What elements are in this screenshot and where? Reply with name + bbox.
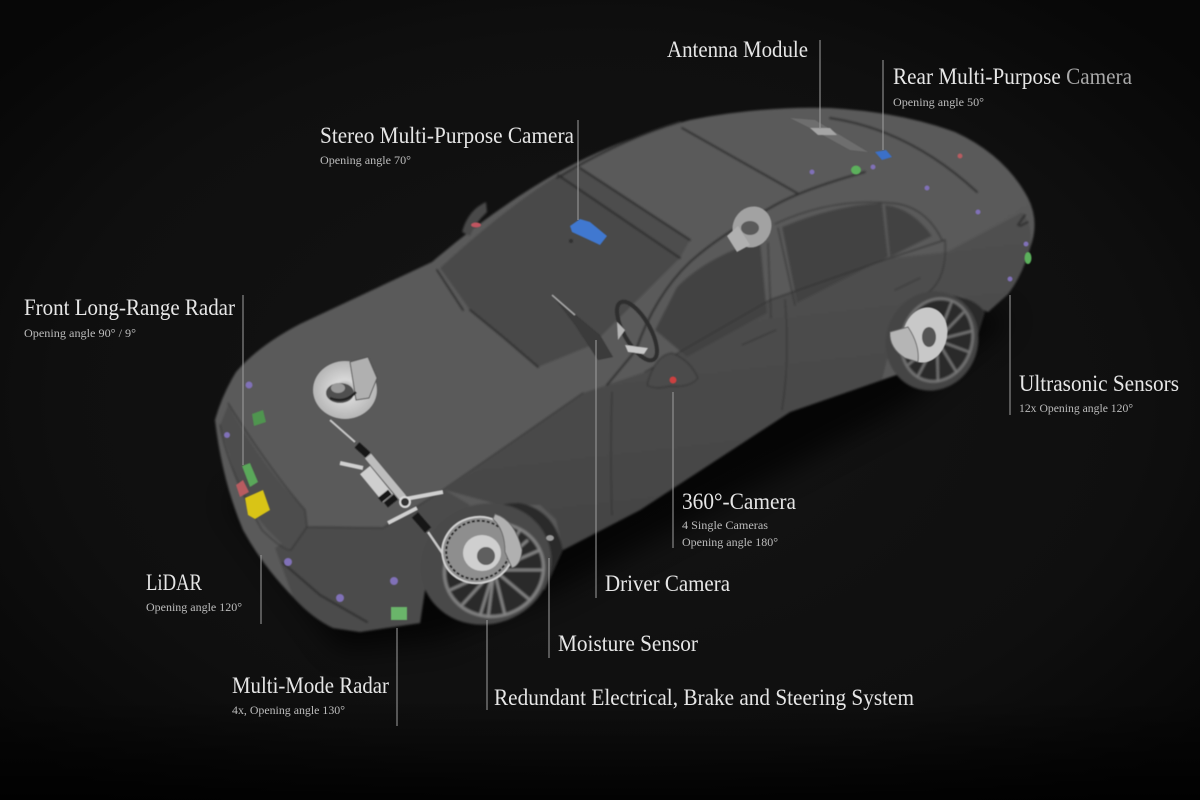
label: ultrasonic sensors: 12x Opening angle 120° (1019, 401, 1133, 415)
rear wheel (873, 279, 991, 403)
ultrasonic sensors (224, 164, 1028, 602)
left mirror (462, 202, 487, 236)
label: front long-range radar: Front Long-Range Radar (24, 295, 235, 320)
label: front long-range radar (24, 295, 235, 340)
rear quarter window (885, 205, 932, 257)
label: multi-mode radar: 4x, Opening angle 130° (232, 703, 345, 717)
rear side window (782, 203, 888, 303)
label: rear multi-purpose camera: Opening angle 50° (893, 95, 984, 109)
rear brake disc (890, 302, 953, 368)
headlight (220, 405, 307, 550)
label: driver camera: Driver Camera (605, 571, 730, 596)
green roof sensor (851, 166, 861, 174)
front radar sensor (242, 463, 258, 487)
red front camera (236, 480, 249, 497)
ground shadow (230, 300, 1010, 650)
label: ultrasonic sensors (1019, 371, 1179, 415)
sensors (224, 118, 1032, 620)
front brake disc (435, 509, 522, 591)
right mirror (647, 353, 698, 388)
car illustration (215, 108, 1035, 643)
rear red marker (958, 154, 962, 158)
label: moisture sensor: Moisture Sensor (558, 631, 698, 656)
antenna module (790, 118, 868, 152)
brake and steering system (313, 199, 953, 591)
LiDAR sensor (245, 490, 270, 519)
label: 360-camera: Opening angle 180° (682, 535, 778, 549)
label: lidar: LiDAR (146, 570, 203, 595)
mirror camera (670, 376, 676, 384)
label: rear multi-purpose camera (893, 64, 1132, 109)
label: rear multi-purpose camera: Rear Multi-Purpose Camera (893, 64, 1132, 89)
label: 360-camera: 360°-Camera (682, 489, 796, 514)
rear camera (875, 150, 892, 160)
front wheel (403, 485, 569, 643)
green sensor hood (252, 410, 266, 426)
windshield (440, 175, 680, 367)
label: multi-mode radar: Multi-Mode Radar (232, 673, 389, 698)
front bumper (275, 490, 470, 632)
label: redundant systems: Redundant Electrical, Brake and Steering System (494, 685, 914, 710)
left mirror camera (471, 222, 481, 228)
label: 360-camera (682, 489, 796, 549)
roof brake disc (725, 199, 779, 255)
steering wheel and dashboard (552, 295, 665, 366)
stereo camera (569, 219, 607, 245)
label: multi-mode radar (232, 673, 389, 717)
label: stereo multi-purpose camera: Opening angle 70° (320, 153, 411, 167)
body lines (220, 118, 1028, 622)
label: lidar: Opening angle 120° (146, 600, 242, 614)
car body (215, 108, 1035, 632)
steering rack (330, 420, 445, 557)
leader lines (243, 40, 1010, 726)
label: stereo multi-purpose camera: Stereo Multi-Purpose Camera (320, 123, 574, 148)
label: front long-range radar: Opening angle 90° / 9° (24, 326, 136, 340)
front side window (655, 240, 767, 357)
roof band (558, 168, 690, 258)
label: ultrasonic sensors: Ultrasonic Sensors (1019, 371, 1179, 396)
hood brake disc (313, 357, 377, 419)
label: lidar (146, 570, 242, 614)
label: stereo multi-purpose camera (320, 123, 574, 167)
green rear sensor (1024, 252, 1032, 264)
moisture sensor (546, 535, 554, 541)
multi-mode radar sensor (391, 607, 407, 620)
label: antenna module: Antenna Module (667, 37, 808, 62)
label: 360-camera: 4 Single Cameras (682, 518, 768, 532)
door and side panels (445, 212, 1031, 550)
